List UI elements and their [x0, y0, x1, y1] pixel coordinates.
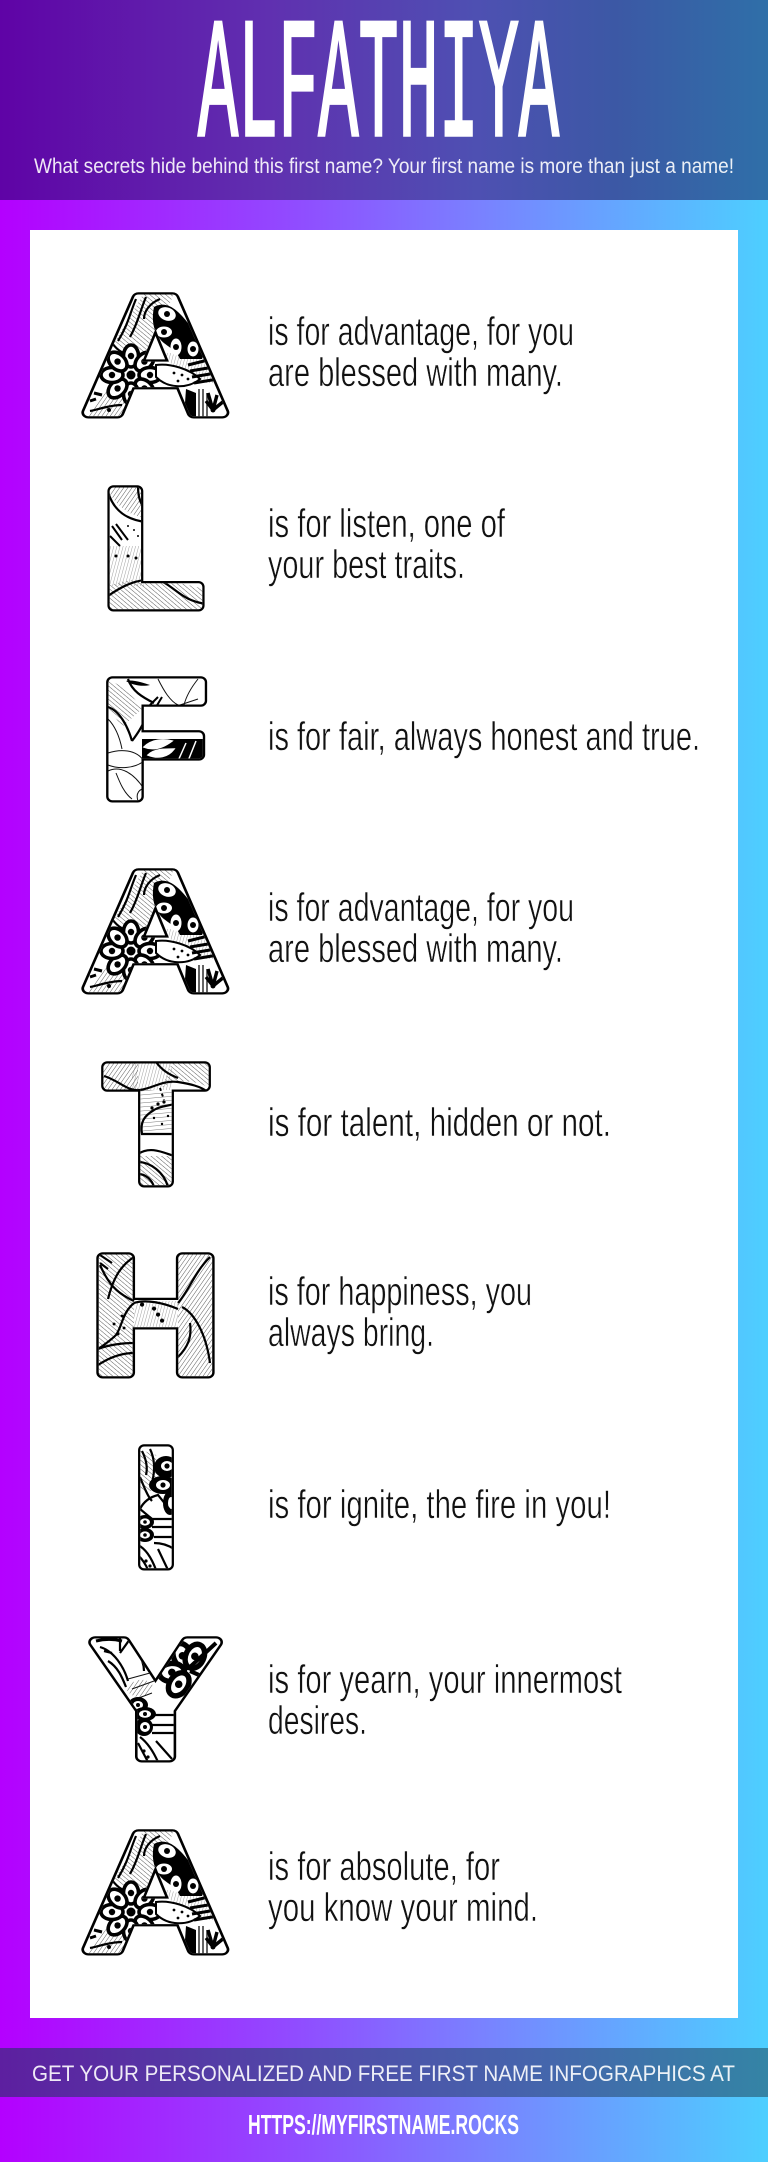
illustrated letter L: L: [102, 456, 204, 642]
text: happiness: is for happiness, you: [268, 1270, 532, 1314]
text: advantage: is for advantage, for you: [268, 310, 574, 354]
illustrated letter A: A: [84, 1799, 227, 1985]
text: ignite: is for ignite, the fire in you!: [268, 1483, 611, 1527]
row: letter T: [102, 1032, 611, 1218]
row: letter A second: [84, 838, 574, 1024]
illustrated letter Y: Y: [92, 1606, 219, 1792]
text: advantage: [268, 886, 574, 971]
white card panel: [30, 230, 738, 2018]
illustrated letter L: L: [102, 456, 204, 642]
illustrated letter A: A: [84, 1799, 227, 1985]
text: listen: is for listen, one of: [268, 502, 506, 546]
illustrated letter A: [81, 868, 230, 994]
header band: [0, 0, 768, 200]
row: letter Y: [92, 1606, 622, 1792]
footer band: [0, 2048, 768, 2097]
text: absolute: [268, 1845, 538, 1930]
row: letter F: [101, 647, 700, 833]
illustrated letter I: I: [133, 1416, 179, 1600]
text: yearn: is for yearn, your innermost: [268, 1658, 622, 1702]
illustrated letter A: [81, 292, 230, 418]
illustrated letter H: [96, 1252, 215, 1378]
illustrated letter F: [106, 676, 208, 802]
illustrated letter T: [101, 1061, 211, 1188]
text: absolute: is for absolute, for: [268, 1845, 500, 1889]
illustrated letter H: H: [91, 1223, 220, 1408]
text: advantage: are blessed with many.: [268, 351, 563, 395]
text: listen: [268, 502, 506, 587]
text: advantage: are blessed with many.: [268, 927, 563, 971]
illustrated letter Y: [88, 1636, 223, 1762]
text: yearn: desires.: [268, 1699, 367, 1743]
illustrated letter A: A: [84, 838, 227, 1024]
text: advantage: [268, 310, 574, 395]
text: absolute: you know your mind.: [268, 1886, 538, 1930]
row: letter H: [91, 1223, 532, 1408]
text: happiness: always bring.: [268, 1311, 434, 1355]
footer url: HTTPS://MYFIRSTNAME.ROCKS: [248, 2109, 519, 2140]
illustrated letter T: T: [105, 1032, 207, 1218]
row: letter A: [84, 262, 574, 448]
illustrated letter L: [107, 485, 205, 612]
illustrated letter T: T: [105, 1032, 207, 1218]
illustrated letter A: [81, 1829, 230, 1956]
illustrated letter A: A: [84, 262, 227, 448]
text: listen: your best traits.: [268, 543, 465, 587]
text: advantage: is for advantage, for you: [268, 886, 574, 930]
illustrated letter A: A: [84, 838, 227, 1024]
illustrated letter A: A: [84, 262, 227, 448]
row: letter I: [133, 1416, 611, 1600]
illustrated letter I: [138, 1444, 174, 1570]
text: yearn: [268, 1658, 622, 1743]
illustrated letter I: I: [133, 1416, 179, 1600]
text: happiness: [268, 1270, 532, 1355]
row: letter A third: [81, 1829, 536, 1956]
illustrated letter F: F: [101, 647, 207, 833]
illustrated letter Y: Y: [92, 1606, 219, 1792]
illustrated letter H: H: [91, 1223, 220, 1408]
row: letter L: [102, 456, 506, 642]
illustrated letter F: F: [101, 647, 207, 833]
text: talent: is for talent, hidden or not.: [268, 1101, 611, 1145]
